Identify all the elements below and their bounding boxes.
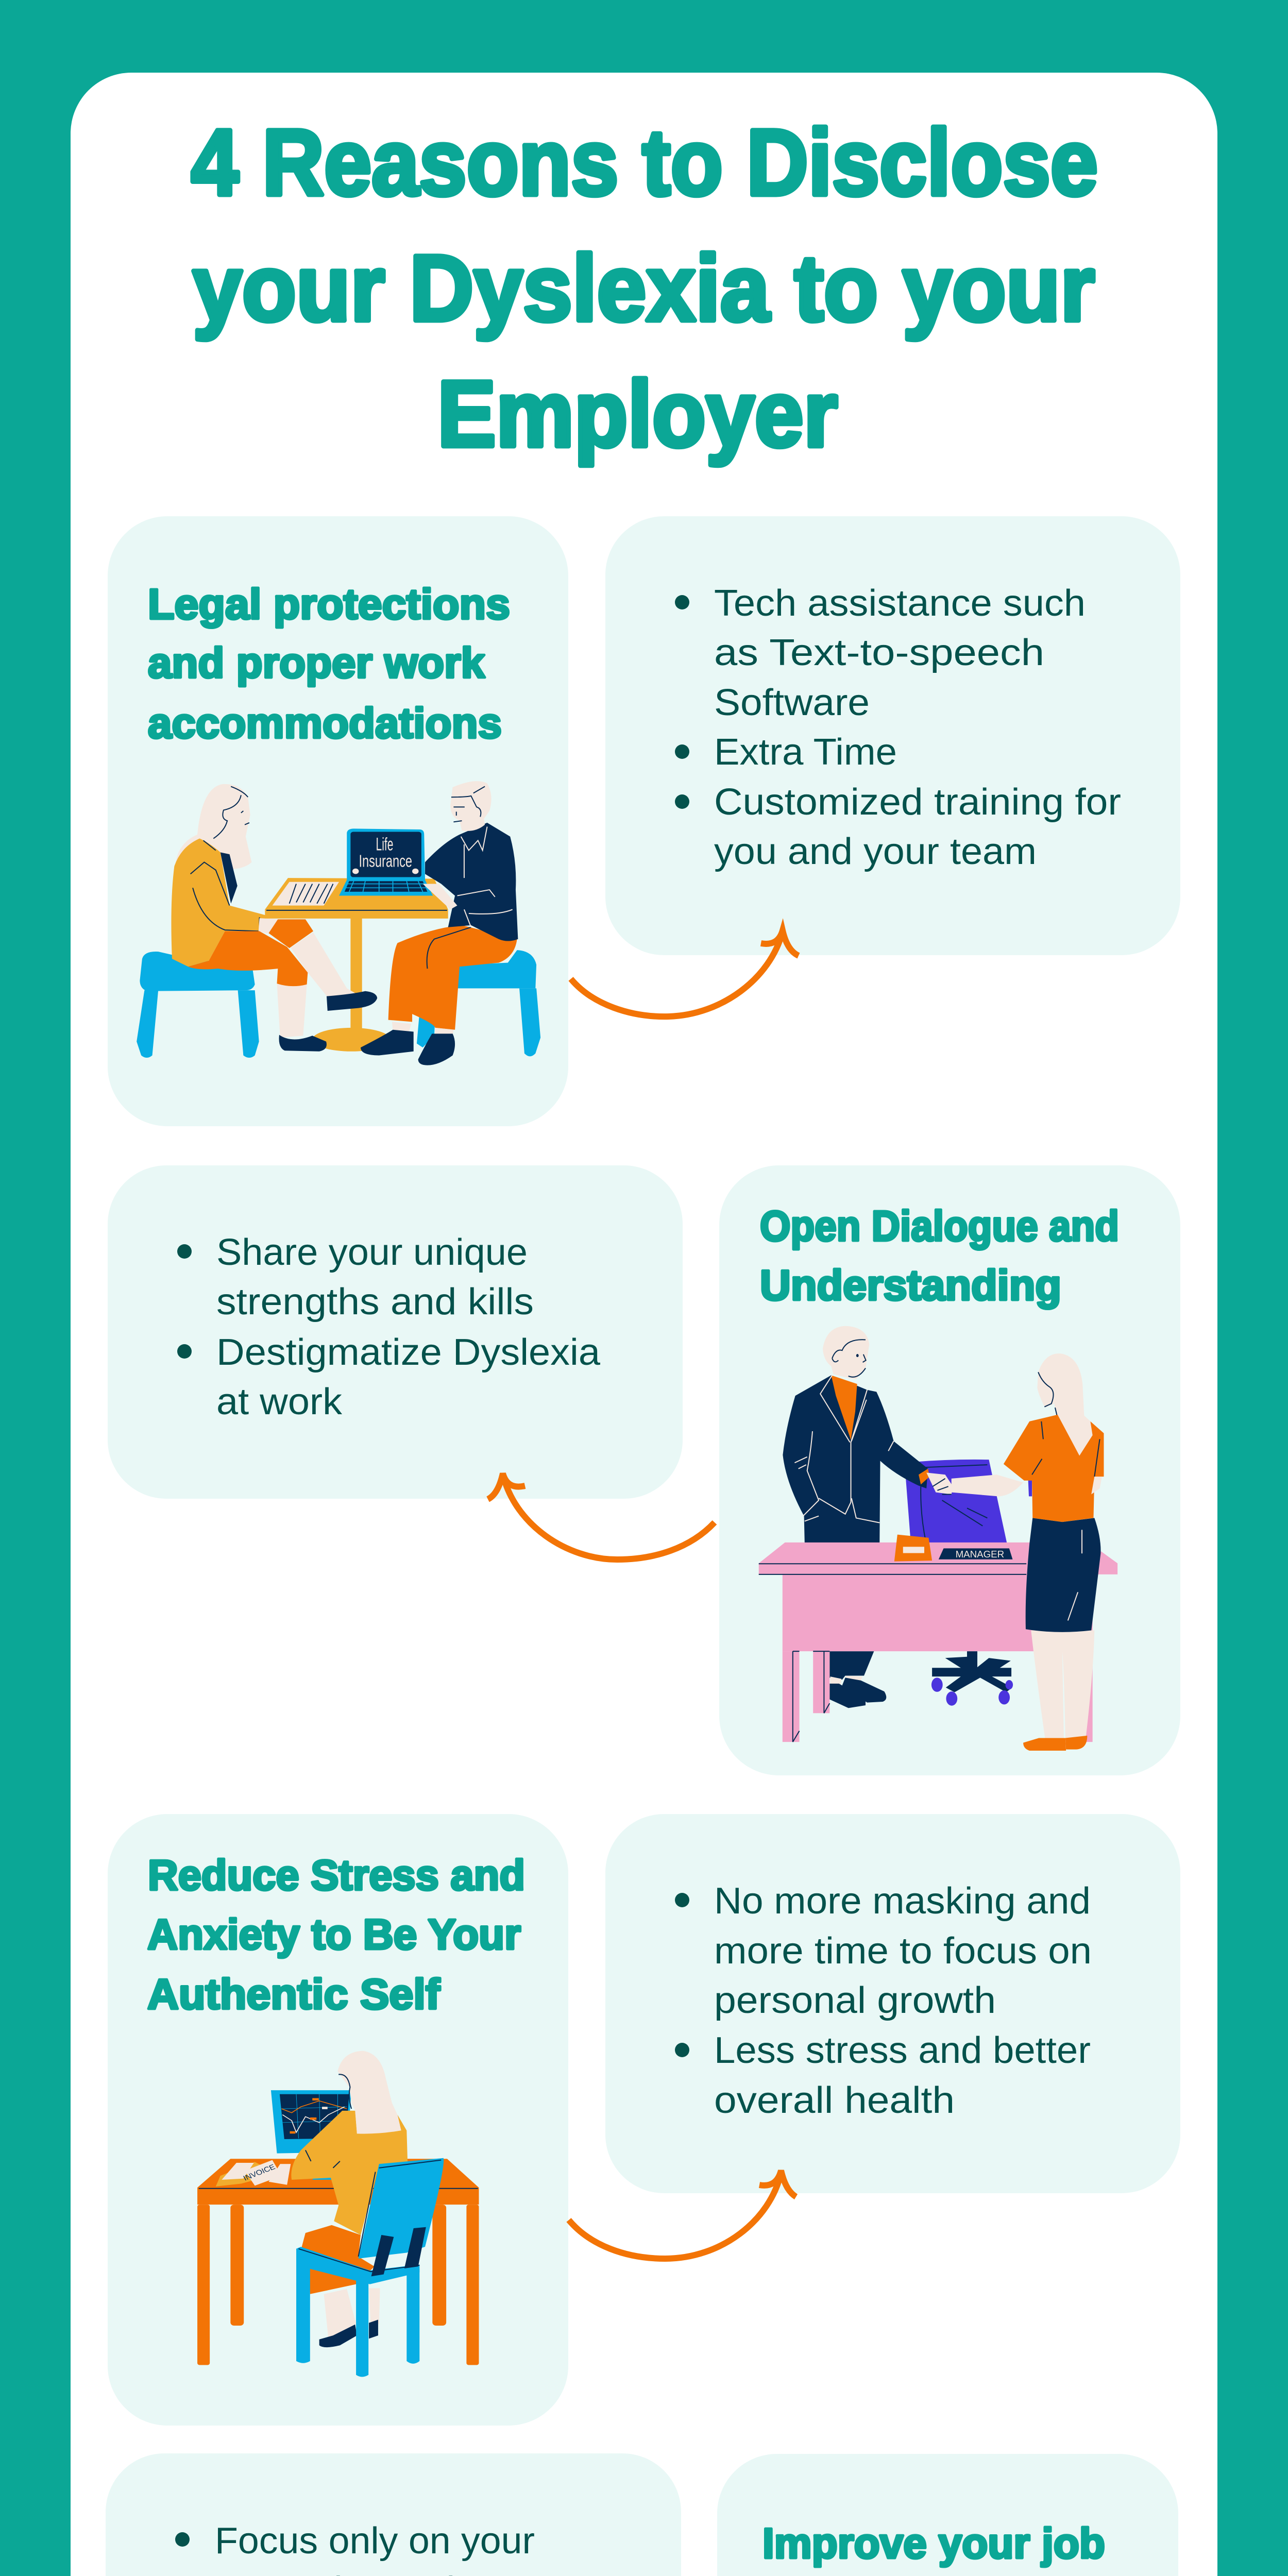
list text: Share your unique xyxy=(216,1232,528,1273)
heading: reduce stress xyxy=(147,1851,525,2018)
list text: Less stress and better xyxy=(714,2030,1091,2071)
list text xyxy=(215,2520,589,2576)
card background xyxy=(108,1814,568,2426)
panel: legal protections xyxy=(108,516,568,1126)
illustration: handshake at manager desk: MANAGER xyxy=(956,1549,1004,1560)
arrow 1 xyxy=(571,930,799,1016)
list text: Software xyxy=(714,682,870,723)
illustration: woman working at desk: INVOICE xyxy=(242,2163,277,2182)
bullets xyxy=(675,1893,689,2057)
card background xyxy=(106,2453,681,2576)
panel: open dialogue xyxy=(719,1165,1180,1775)
list text: you and your team xyxy=(714,831,1037,872)
panel: accommodations list xyxy=(605,516,1180,955)
illustration: woman working at desk xyxy=(197,2051,479,2377)
list text: No more masking and xyxy=(714,1880,1091,1922)
card background xyxy=(108,1165,683,1499)
list text: more time to focus on xyxy=(714,1930,1092,1972)
title: 4 Reasons to Disclose xyxy=(191,110,1098,215)
title: Employer xyxy=(437,361,838,466)
heading: open dialogue: Understanding xyxy=(760,1261,1061,1309)
panel: reduce stress xyxy=(108,1814,568,2426)
list text: overall health xyxy=(714,2080,955,2121)
list text: personal growth xyxy=(714,1980,996,2021)
panel: stress list xyxy=(605,1814,1180,2193)
heading: reduce stress: Anxiety to Be Your xyxy=(147,1910,521,1958)
card background xyxy=(719,1165,1180,1775)
card background xyxy=(605,516,1180,955)
list text: Extra Time xyxy=(714,732,897,773)
list text xyxy=(216,1232,601,1422)
list text xyxy=(714,583,1121,872)
illustration: handshake at manager desk xyxy=(759,1326,1117,1751)
list text: Tech assistance such xyxy=(714,583,1086,624)
title xyxy=(191,110,1098,466)
heading: legal protections xyxy=(148,580,510,747)
list text: strengths and kills xyxy=(216,1281,534,1323)
heading: reduce stress: Reduce Stress and xyxy=(148,1851,525,1899)
card background xyxy=(605,1814,1180,2193)
list text: at work xyxy=(216,1381,343,1422)
heading: reduce stress: Authentic Self xyxy=(147,1970,440,2018)
title: your Dyslexia to your xyxy=(193,235,1095,341)
list text: Focus only on your xyxy=(215,2520,535,2562)
heading: legal protections: and proper work xyxy=(148,639,485,687)
card background xyxy=(717,2454,1178,2576)
heading: legal protections: Legal protections xyxy=(148,580,510,628)
arrow 3 xyxy=(569,2171,796,2259)
heading: open dialogue xyxy=(760,1202,1119,1309)
illustration: two people at a table with laptop xyxy=(137,781,540,1065)
bullets xyxy=(675,595,689,809)
panel: performance list xyxy=(106,2453,681,2576)
panel: improve performance xyxy=(717,2454,1178,2576)
heading: open dialogue: Open Dialogue and xyxy=(760,1202,1119,1250)
arrow 2 xyxy=(488,1473,715,1560)
bullets xyxy=(177,1244,192,1359)
list text: Destigmatize Dyslexia xyxy=(216,1332,601,1373)
panel: dialogue list xyxy=(108,1165,683,1499)
list text: Customized training for xyxy=(714,782,1121,823)
card background xyxy=(108,516,568,1126)
bullet xyxy=(175,2532,190,2547)
list text xyxy=(714,1880,1092,2121)
illustration: two people at a table with laptop: Life xyxy=(376,834,393,855)
illustration: two people at a table with laptop: Insurance xyxy=(359,851,412,871)
heading: legal protections: accommodations xyxy=(148,699,502,747)
list text: as Text-to-speech xyxy=(714,632,1044,673)
heading: improve performance: Improve your job xyxy=(762,2519,1105,2567)
